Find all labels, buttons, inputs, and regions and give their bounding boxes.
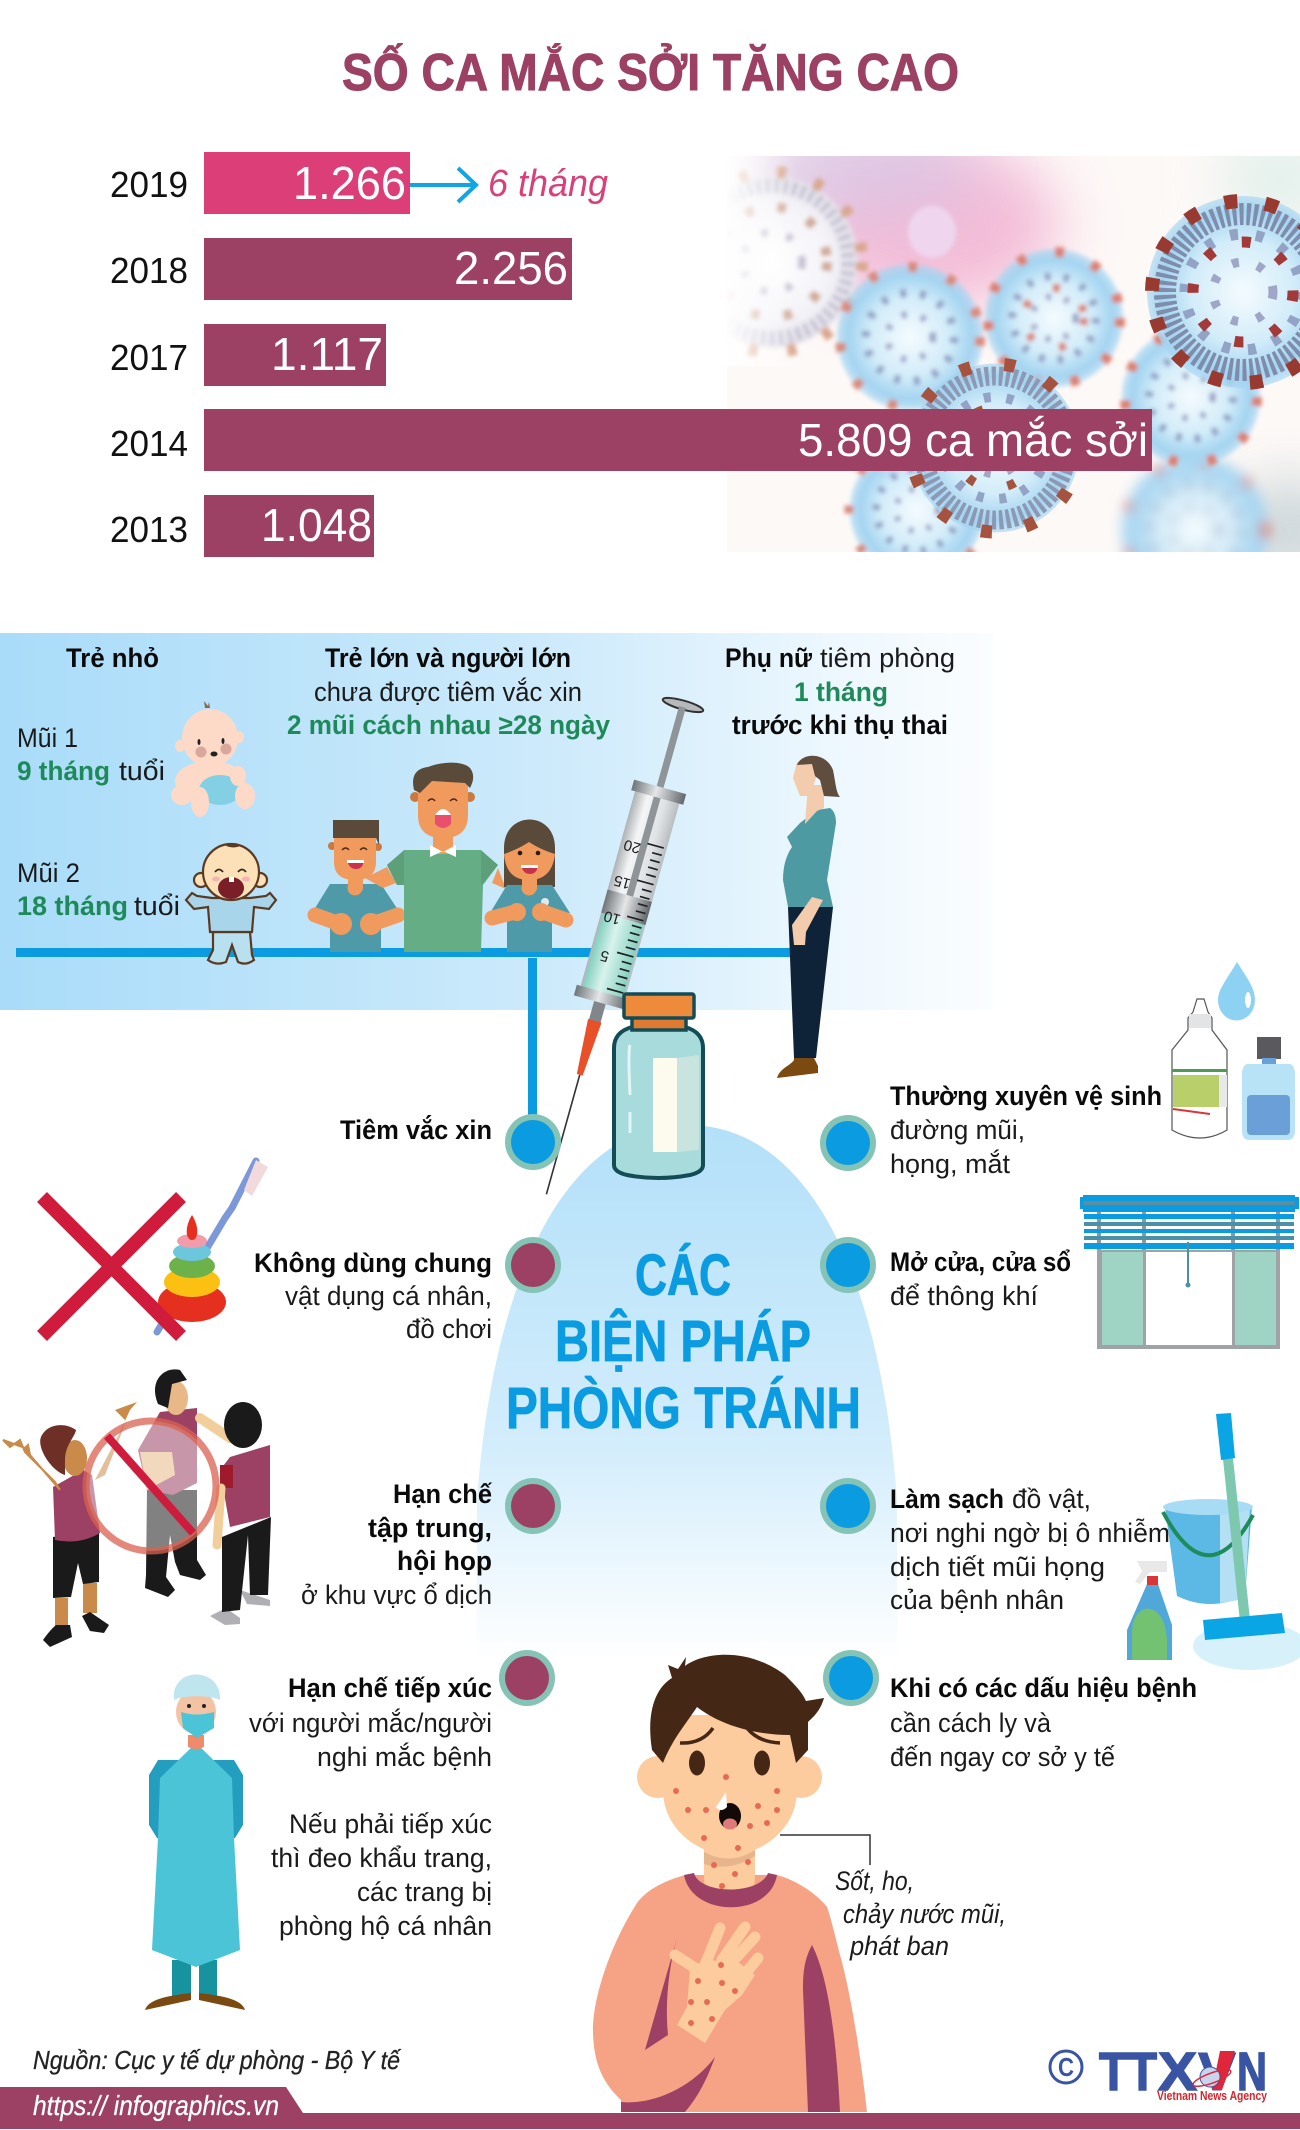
bar 2013: 2013 (110, 509, 188, 550)
text: women before pregnancy: Phụ nữ (725, 643, 812, 673)
bar 2013: 1.048 (261, 499, 372, 551)
bar 2019 (110, 152, 410, 214)
heading: prevention measures (506, 1243, 861, 1441)
text: open windows (890, 1247, 1071, 1311)
text: clean nose and throat (890, 1081, 1162, 1179)
text: clean nose and throat: đường mũi, (890, 1115, 1025, 1145)
text: clean nose and throat: họng, mắt (890, 1148, 1010, 1179)
bar 2014 (110, 409, 1152, 471)
neck (704, 1845, 755, 1906)
text: protective equipment: thì đeo khẩu trang, (271, 1843, 492, 1873)
father (365, 763, 506, 952)
label: 6 months: 6 tháng (488, 163, 608, 205)
text: do not share: Không dùng chung (254, 1248, 492, 1278)
icon: doctor in gown (145, 1674, 245, 2010)
logo: TTXVN: X (1158, 2042, 1197, 2102)
icon: sitting baby (171, 701, 255, 817)
icon: syringe (520, 693, 710, 1202)
sharp virus, centre (911, 364, 1079, 532)
arrow: to 6 months (410, 168, 476, 202)
text: young children: tuổi (134, 891, 180, 921)
text: limit gatherings: tập trung, (368, 1513, 492, 1543)
shirt (593, 1875, 867, 2112)
bar 2014: 2014 (110, 423, 188, 464)
person middle (138, 1369, 206, 1597)
heading: prevention measures: BIỆN PHÁP (555, 1309, 811, 1374)
text: do not share: đồ chơi (406, 1314, 492, 1344)
bar chart: measles cases by year (110, 152, 1152, 557)
text: do not share (254, 1248, 492, 1344)
bar 2017: 2017 (110, 337, 188, 378)
bar 2019: 2019 (110, 164, 188, 205)
icon: syringe: 20 (622, 836, 643, 856)
text: women before pregnancy: trước khi thụ thai (732, 710, 948, 740)
text: young children: 9 tháng (17, 756, 110, 786)
text: limit contact: với người mắc/người (249, 1707, 492, 1738)
text: clean objects: dịch tiết mũi họng (890, 1552, 1105, 1582)
text: open windows: để thông khí (890, 1281, 1038, 1311)
bar 2019: 1.266 (293, 157, 406, 209)
icon: crying toddler (186, 843, 276, 964)
text: protective equipment (271, 1809, 492, 1941)
text: young children: 18 tháng (17, 891, 128, 921)
text: young children: Mũi 2 (17, 858, 80, 888)
icon: bucket, mop and spray (1127, 1413, 1300, 1670)
text: protective equipment: Nếu phải tiếp xúc (289, 1809, 492, 1839)
text: protective equipment: các trang bị (357, 1877, 492, 1907)
callout: symptoms: chảy nước mũi, (843, 1899, 1006, 1929)
text: young children (17, 643, 180, 921)
bar 2017 (110, 324, 386, 386)
text: open windows: Mở cửa, cửa sổ (890, 1247, 1071, 1277)
text: older children and adults: Trẻ lớn và người lớn (325, 643, 571, 673)
bar 2018 (110, 238, 572, 300)
bar 2017: 1.117 (271, 328, 383, 380)
text: limit gatherings (301, 1479, 493, 1610)
text: limit contact (249, 1673, 492, 1772)
icon: sick boy (593, 1655, 867, 2112)
text: clean objects: của bệnh nhân (890, 1585, 1064, 1615)
markers: right column (820, 1115, 879, 1706)
icon: syringe: 10 (602, 907, 623, 928)
text: do not share: vật dụng cá nhân, (285, 1281, 492, 1311)
photo: measles virus (730, 156, 1300, 552)
text: when symptoms appear: Khi có các dấu hiệu bệnh (890, 1673, 1197, 1703)
text: clean objects: Làm sạch (890, 1484, 1004, 1514)
text: women before pregnancy (725, 643, 955, 740)
panel: vaccination groups background (0, 633, 995, 1010)
icon: window with blinds (1080, 1195, 1299, 1349)
text: limit gatherings: ở khu vực ổ dịch (301, 1580, 492, 1610)
text: when symptoms appear (890, 1673, 1197, 1772)
text: young children: Trẻ nhỏ (66, 643, 159, 673)
text: when symptoms appear: cần cách ly và (890, 1708, 1052, 1738)
icon: crowd with prohibition sign (3, 1369, 271, 1647)
icon: syringe: 15 (612, 871, 633, 892)
text: limit contact: nghi mắc bệnh (317, 1741, 492, 1772)
logo: TTXVN: TT (1099, 2042, 1157, 2102)
logo: TTXVN: Vietnam News Agency (1157, 2088, 1268, 2103)
icon: crossed-out toy and toothbrush (42, 1160, 268, 1336)
prohibition sign (86, 1421, 216, 1551)
callout: symptoms: Sốt, ho, (835, 1866, 914, 1896)
callout: symptoms (835, 1866, 1006, 1961)
icon: saline bottle and mouthwash (1172, 962, 1295, 1140)
bar 2018: 2018 (110, 250, 188, 291)
logo: TTXVN: C (1058, 2052, 1074, 2082)
person right (200, 1402, 271, 1625)
text: clean objects: đồ vật, (1012, 1484, 1091, 1514)
icon: woman standing (777, 756, 840, 1078)
logo: TTXVN: V (1198, 2042, 1236, 2102)
text: older children and adults: chưa được tiêm vắc xin (314, 676, 582, 707)
text: protective equipment: phòng hộ cá nhân (279, 1911, 492, 1941)
head (637, 1756, 679, 1798)
text: women before pregnancy: tiêm phòng (820, 643, 955, 673)
sharp virus, top right (1147, 196, 1300, 388)
text: when symptoms appear: đến ngay cơ sở y tế (890, 1742, 1115, 1772)
logo: TTXVN: N (1237, 2042, 1267, 2102)
callout line (780, 1835, 870, 1865)
text: clean objects: nơi nghi ngờ bị ô nhiễm (890, 1517, 1170, 1548)
callout: symptoms: phát ban (849, 1931, 949, 1961)
footer band (0, 2087, 1300, 2129)
text: young children: tuổi (119, 756, 165, 786)
text: older children and adults: 2 mũi cách nhau ≥28 ngày (287, 710, 610, 740)
icon: vaccine vial (614, 994, 703, 1178)
text: older children and adults (287, 643, 610, 740)
text: limit gatherings: Hạn chế (393, 1479, 493, 1509)
pale virus, top left (736, 164, 870, 359)
text: vaccination: Tiêm vắc xin (340, 1114, 492, 1145)
markers: left column (499, 1114, 561, 1706)
source: Nguồn: Cục y tế dự phòng - Bộ Y tế (33, 2045, 401, 2075)
dome: prevention measures background (477, 1125, 897, 1660)
girl (490, 820, 570, 952)
person left (3, 1402, 137, 1647)
boy (312, 820, 400, 952)
logo: TTXVN (1050, 2042, 1268, 2103)
heading: prevention measures: PHÒNG TRÁNH (506, 1376, 861, 1441)
text: limit contact: Hạn chế tiếp xúc (288, 1673, 492, 1703)
icon: family of three (312, 763, 570, 952)
bar 2013 (110, 495, 374, 557)
text: women before pregnancy: 1 tháng (794, 677, 888, 707)
text: clean objects (890, 1484, 1170, 1615)
bar 2018: 2.256 (454, 242, 568, 294)
icon: syringe: 5 (598, 946, 611, 965)
footer url: https:// infographics.vn (33, 2090, 279, 2121)
timeline bar (16, 948, 801, 1128)
heading: prevention measures: CÁC (635, 1243, 731, 1308)
hand (675, 1927, 758, 2043)
text: young children: Mũi 1 (17, 723, 78, 753)
text: limit gatherings: hội họp (397, 1546, 492, 1576)
text: clean nose and throat: Thường xuyên vệ sinh (890, 1081, 1162, 1111)
title: SỐ CA MẮC SỞI TĂNG CAO (342, 43, 959, 102)
bar 2014: 5.809 ca mắc sởi (798, 414, 1148, 466)
